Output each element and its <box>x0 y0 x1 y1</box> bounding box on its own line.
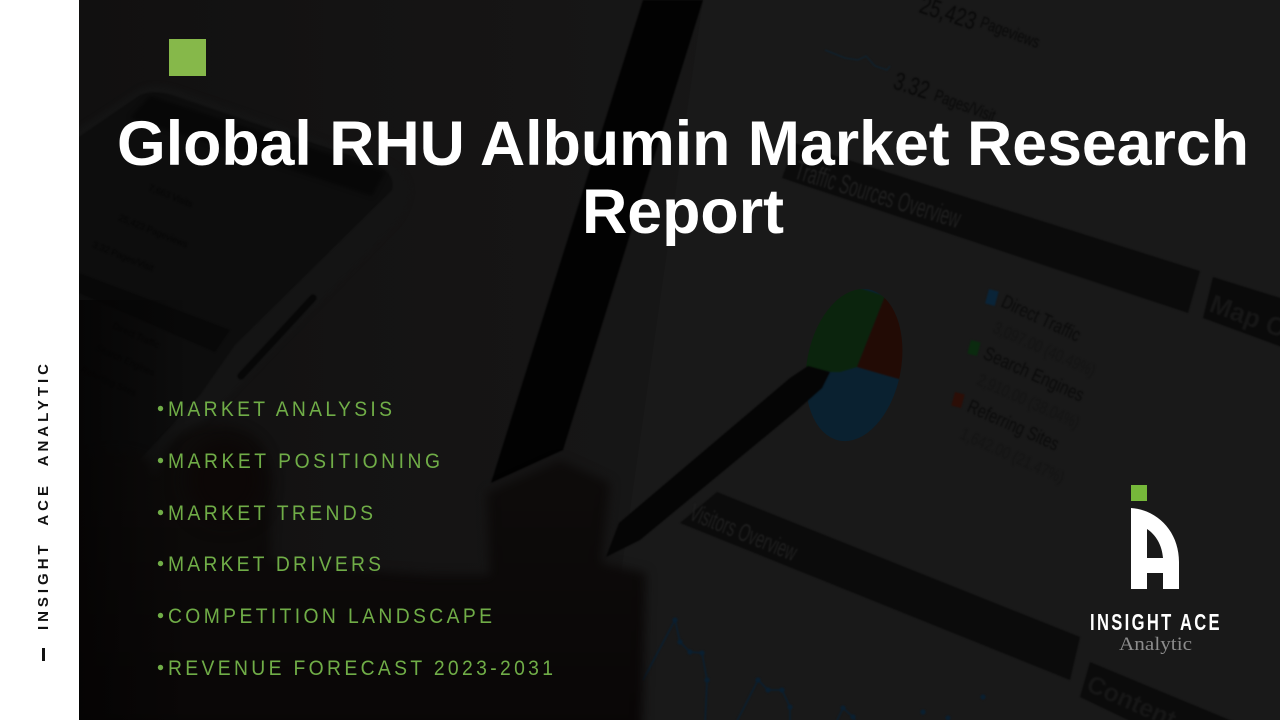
pie legend: 3,097.00 (40.49%) <box>990 318 1099 380</box>
hand holding pen <box>79 432 647 720</box>
phone: Direct Traffic <box>111 321 162 351</box>
tablet bar: lower right <box>1080 662 1229 720</box>
tablet edge: dark stripe <box>491 0 703 483</box>
pie legend: 2,910.00 (38.04%) <box>974 370 1083 432</box>
phone: 3.32 Pages/Visit <box>91 240 156 273</box>
tablet bar: visitors overview: Visitors Overview <box>686 499 802 567</box>
tablet stats: pageviews <box>825 0 1042 126</box>
logo: wordmark: INSIGHT ACE <box>1090 610 1220 636</box>
pie legend: 1,642.00 (21.47%) <box>957 424 1067 487</box>
pie legend: Referring Sites <box>964 396 1062 455</box>
pie chart <box>806 289 902 441</box>
line chart: visitors <box>643 617 986 720</box>
pie legend <box>952 289 1083 450</box>
phone: 7,663 Visits <box>147 183 194 209</box>
tablet stats: pageviews: 3.32 <box>890 67 933 105</box>
tablet bar: visitors overview <box>680 492 1080 680</box>
logo: green square <box>1131 485 1147 501</box>
phone <box>80 96 389 379</box>
pie legend: Direct Traffic <box>998 291 1084 346</box>
logo: letter A mark <box>1131 508 1179 589</box>
phone side button <box>241 298 313 376</box>
item: market positioning: MARKET POSITIONING <box>168 450 440 473</box>
tablet stats: pageviews: Pages/Visit <box>932 86 998 126</box>
tablet bar: traffic sources: Traffic Sources Overview <box>791 155 965 234</box>
logo <box>1090 485 1220 655</box>
feature list <box>158 398 553 680</box>
item: market analysis: MARKET ANALYSIS <box>168 398 392 421</box>
item: revenue forecast: REVENUE FORECAST 2023-2031 <box>168 657 553 680</box>
title: Global RHU Albumin Market Research <box>117 109 1249 179</box>
pen <box>606 366 830 557</box>
sidebar vertical brand text: INSIGHT ACE ANALYTIC <box>35 364 52 630</box>
accent square <box>169 39 206 76</box>
pie legend: Search Engines <box>980 343 1087 406</box>
phone: 25,423 Pageviews <box>117 213 190 250</box>
tablet bar: traffic sources <box>782 143 1200 313</box>
item: market trends: MARKET TRENDS <box>168 502 373 525</box>
phone: Search Engines <box>94 343 157 378</box>
title <box>117 109 1249 247</box>
item: market drivers: MARKET DRIVERS <box>168 553 381 576</box>
sidebar: white strip <box>0 0 79 720</box>
item: competition landscape: COMPETITION LANDSCAPE <box>168 605 492 628</box>
logo: analytic: Analytic <box>1119 634 1192 655</box>
title: Report <box>582 177 784 247</box>
phone: Referring Sites <box>79 365 138 398</box>
tablet stats: pageviews: Pageviews <box>978 13 1042 52</box>
